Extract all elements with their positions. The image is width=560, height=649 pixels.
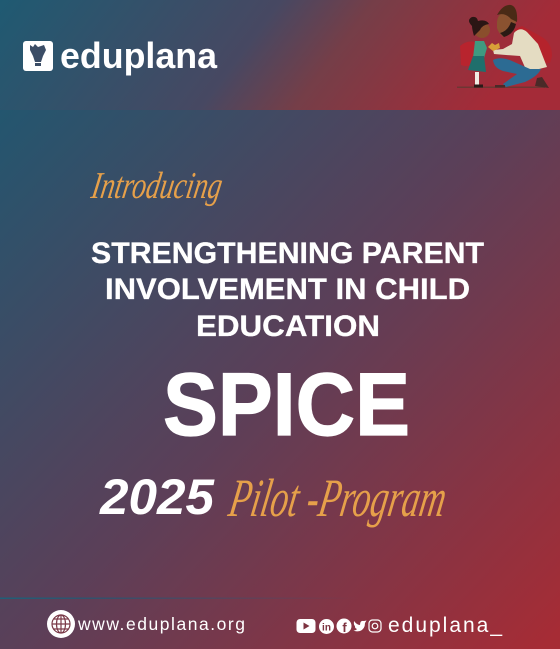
panel: footer (47, 610, 502, 638)
father's backpack (514, 26, 552, 64)
text: 2025: 2025 (99, 469, 215, 525)
father's beard (500, 22, 516, 37)
father's jeans (493, 58, 541, 87)
heading: SPICE: SPICE (163, 354, 410, 454)
title line 2: INVOLVEMENT IN CHILD (105, 273, 470, 306)
text: Pilot-Program script: Pilot -Program (224, 468, 451, 528)
icon: instagram (369, 620, 381, 632)
child's leg (475, 72, 479, 85)
child's head (474, 22, 490, 38)
icon: eduplana logo mark (23, 41, 53, 71)
father's shoe (535, 77, 549, 88)
father's hair (497, 5, 517, 22)
icon: facebook: f (342, 620, 347, 635)
panel: header band (0, 0, 560, 110)
icon: parent and child illustration (457, 5, 552, 88)
father's head (497, 12, 516, 37)
icon: twitter (354, 620, 366, 631)
text: website: www.eduplana.org (77, 614, 245, 634)
icon: youtube (296, 619, 316, 633)
title (91, 237, 484, 343)
icon: globe (47, 610, 75, 638)
gift in hands (488, 43, 500, 51)
child's backpack (460, 42, 476, 66)
father's torso (493, 29, 547, 72)
footer divider (0, 598, 360, 599)
icon: linkedin: in (322, 622, 331, 634)
heading: eduplana wordmark: eduplana (60, 35, 218, 76)
child's skirt (468, 56, 486, 72)
title line 1: STRENGTHENING PARENT (91, 237, 484, 270)
icons: social media (296, 618, 381, 635)
ground shadow (457, 86, 545, 88)
child's top (473, 41, 487, 58)
text: Introducing script: Introducing (88, 165, 226, 207)
text: social handle: eduplana_ (388, 614, 502, 637)
title line 3: EDUCATION (196, 310, 380, 343)
